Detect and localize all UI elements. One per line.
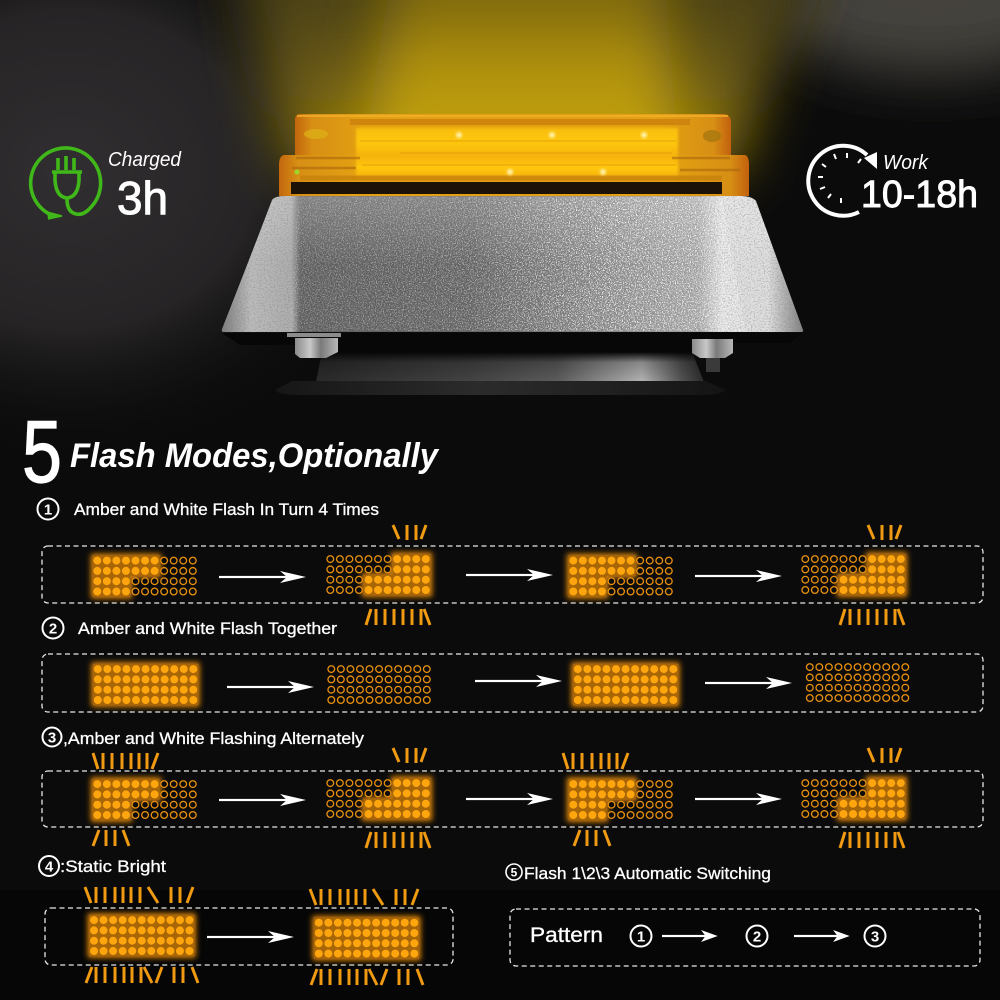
rubber disk [275,381,725,395]
mode 3 heading: 3 [48,730,56,746]
panel: mode 1 [42,525,983,625]
panel: mode 5 pattern: 2 [753,928,761,946]
mode 5 heading: 5 [511,866,518,880]
metal base [222,196,803,332]
panel: mode 5 pattern: Pattern [530,924,603,947]
heading [22,402,440,501]
mode 1 heading: Amber and White Flash In Turn 4 Times [74,500,379,519]
panel: mode 3 [42,748,983,848]
heading: 5 [22,402,62,501]
left nut [287,333,341,358]
hours: 10-18h [861,174,978,216]
amber lower lens [279,155,749,196]
heading: Flash Modes,Optionally [70,437,440,475]
panel: mode 5 pattern: 3 [871,928,879,946]
icon: clock [808,146,877,216]
mode 2 heading: Amber and White Flash Together [78,619,337,638]
charged label: Charged [108,149,182,171]
mode 3 heading: ,Amber and White Flashing Alternately [63,729,365,748]
black underside [222,333,803,352]
3h: 3h [117,172,168,224]
charged block [31,148,182,224]
panel: mode 5 pattern: 1 [637,928,645,946]
panel: mode 4 [45,887,453,985]
work label: Work [883,152,929,174]
mode 4 heading: 4 [45,858,54,876]
dark band [291,182,722,194]
right nut [692,339,733,372]
mode 4 heading: :Static Bright [60,857,166,876]
icon: plug [31,148,101,219]
panel: mode 5 pattern [510,909,980,966]
panel: mode 2 [42,654,983,712]
lit LEDs panel [292,116,740,178]
amber upper lens [295,114,731,160]
mode 2 heading: 2 [49,620,57,638]
mode 5 heading: Flash 1\2\3 Automatic Switching [524,864,771,883]
work block [808,146,978,216]
product: amber beacon light [222,114,803,395]
ring mount [316,352,704,382]
mode 1 heading: 1 [44,502,52,518]
